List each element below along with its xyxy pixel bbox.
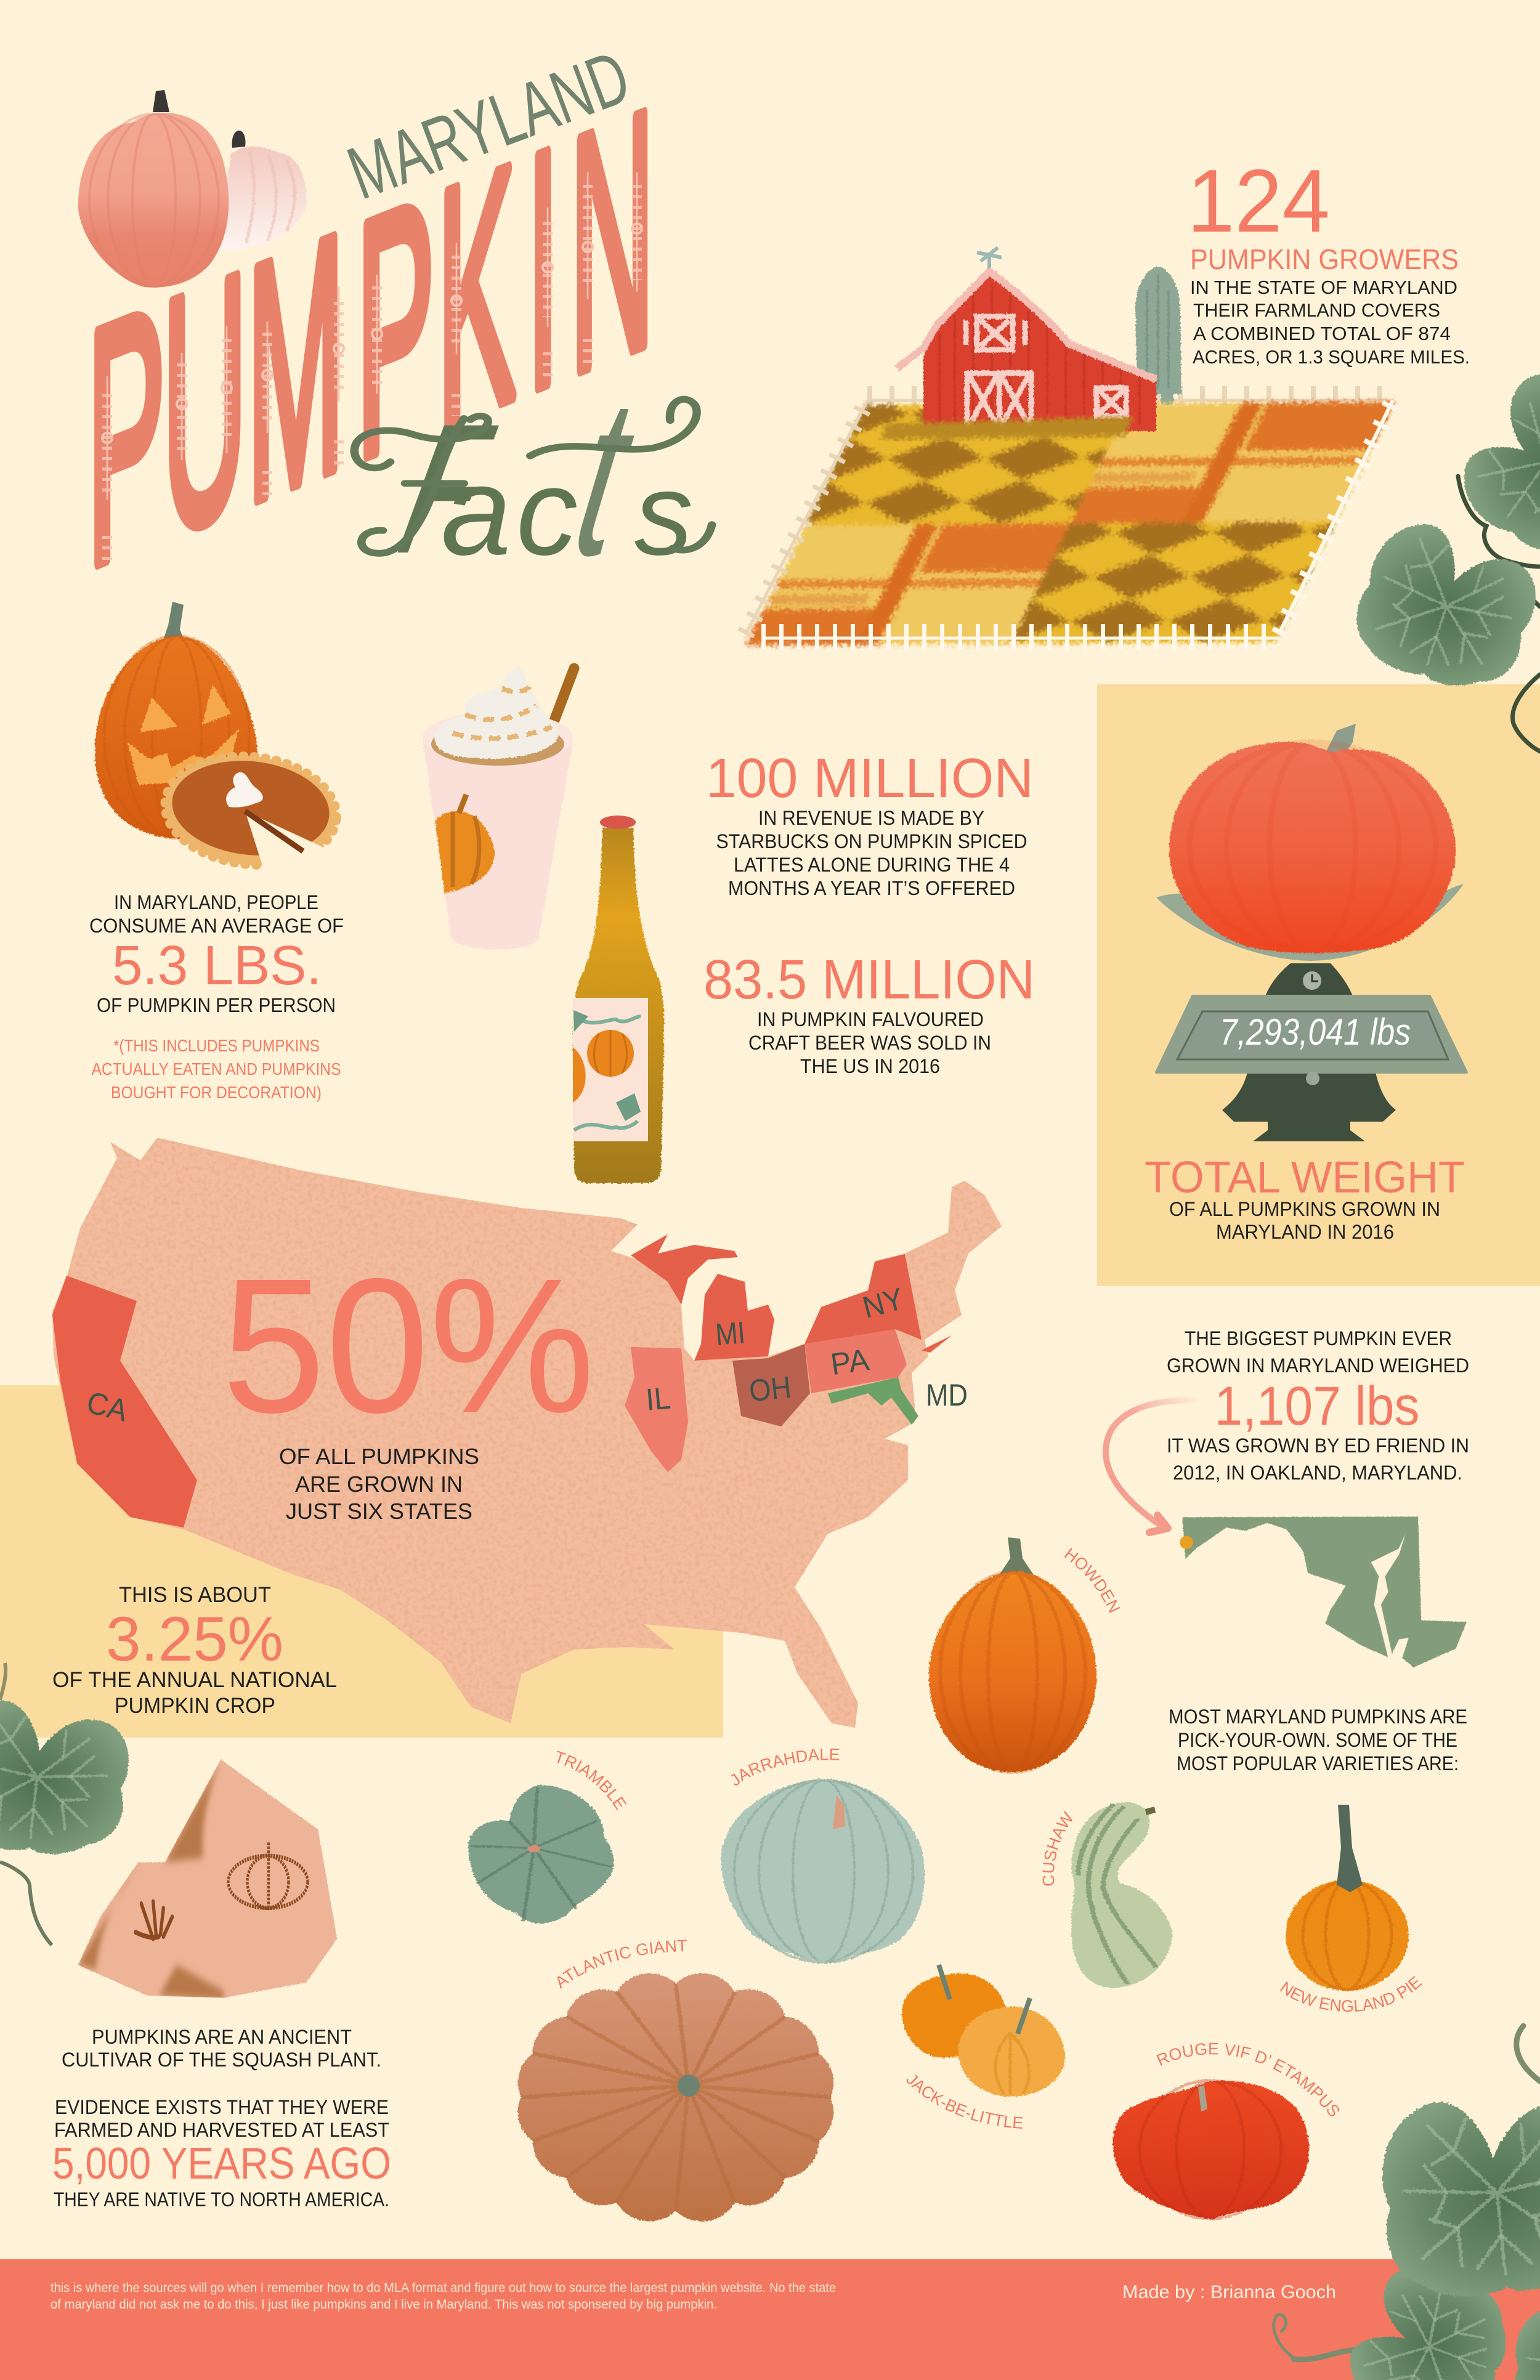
heading and caption: MARYLAND IN 2016 — [1216, 1221, 1394, 1243]
text: consumption per person: 5.3 LBS. — [112, 935, 322, 997]
jarrahdale body — [721, 1780, 925, 1963]
pumpkin: Triamble — [467, 1751, 627, 1924]
arrow: to Oakland — [1106, 1400, 1195, 1532]
icon: scale display plate — [1156, 996, 1467, 1072]
giant stem — [678, 2074, 700, 2097]
icon: latte foam — [431, 722, 564, 766]
tendrils — [0, 1663, 52, 1945]
illustration: ancient rock — [78, 1759, 337, 2000]
heading and caption: TOTAL WEIGHT — [1145, 1153, 1465, 1202]
decoration: left leaf and vine — [0, 1663, 134, 1945]
base map — [52, 1138, 1002, 1728]
field edge in front of barn — [881, 416, 1133, 440]
icon: bottle body — [573, 828, 664, 1183]
text: pick your own: MOST MARYLAND PUMPKINS ARE — [1169, 1706, 1467, 1728]
icon: scale clock — [1303, 971, 1321, 990]
text: consumption per person — [89, 891, 344, 1102]
jarrahdale label: JARRAHDALE — [731, 1748, 839, 1786]
front fence — [761, 637, 1279, 638]
text: 100 million: LATTES ALONE DURING THE 4 — [734, 854, 1010, 876]
state: Michigan upper — [631, 1234, 738, 1305]
howden label: HOWDEN — [1064, 1547, 1120, 1613]
text: pick your own — [1169, 1706, 1467, 1775]
50 percent headline: 50% — [222, 1238, 595, 1452]
icon: pumpkin pie — [160, 748, 342, 873]
text: biggest pumpkin: GROWN IN MARYLAND WEIGHED — [1167, 1354, 1469, 1377]
state: Ohio — [732, 1344, 810, 1427]
icon: giant red pumpkin — [1169, 742, 1456, 953]
pumpkin: New England Pie — [1280, 1805, 1422, 2012]
heading and caption: OF ALL PUMPKINS GROWN IN — [1169, 1198, 1440, 1220]
icon: cinnamon stick — [552, 668, 574, 727]
icon: scale body — [1265, 963, 1353, 998]
title letter F: F — [384, 385, 509, 592]
giant label: ATLANTIC GIANT — [557, 1940, 687, 1989]
cushaw label: CUSHAW — [1042, 1811, 1072, 1886]
text: 100 million: STARBUCKS ON PUMPKIN SPICED — [716, 830, 1027, 852]
icon: whipped cream — [434, 668, 559, 759]
icon: white pumpkin stem — [232, 131, 246, 148]
first little pumpkin — [902, 1973, 1006, 2058]
text: consumption per person: BOUGHT FOR DECORATION) — [111, 1083, 322, 1102]
footer band — [0, 2259, 1540, 2380]
text: 124 pumpkin growers — [1187, 151, 1470, 368]
text: consumption per person: *(THIS INCLUDES PUMPKINS — [113, 1036, 320, 1055]
icon: foam rim — [423, 712, 573, 764]
panel: total weight — [1145, 724, 1467, 1243]
icon: bottle cap — [600, 816, 636, 829]
icon: display knob — [1306, 1072, 1319, 1085]
text: consumption per person: IN MARYLAND, PEOPLE — [114, 891, 318, 913]
icon: cup — [423, 739, 573, 950]
title letters a and c: a — [441, 440, 511, 581]
leaf — [0, 1696, 134, 1861]
text: 83.5 million: IN PUMPKIN FALVOURED — [757, 1008, 984, 1030]
leaf far right — [1515, 2307, 1540, 2380]
icon: jack-o-lantern — [95, 636, 259, 839]
text: 100 million: IN REVENUE IS MADE BY — [758, 807, 984, 829]
leaf lower — [1337, 2254, 1523, 2380]
Chesapeake bay — [1371, 1534, 1406, 1658]
icon: large pumpkin stem — [153, 90, 169, 112]
decoration: upper right leaves and vines — [1343, 357, 1540, 751]
text: ancient cultivar: EVIDENCE EXISTS THAT THEY WERE — [55, 2096, 389, 2118]
state: Illinois — [625, 1347, 688, 1472]
text: 124 pumpkin growers: IN THE STATE OF MARYLAND — [1190, 277, 1457, 298]
panel: national crop background — [0, 1385, 723, 1738]
text: 124 pumpkin growers: ACRES, OR 1.3 SQUARE MILES. — [1193, 346, 1470, 368]
illustration: pumpkin spice latte — [423, 668, 574, 950]
text: biggest pumpkin: 1,107 lbs — [1215, 1375, 1419, 1436]
state: New York — [804, 1254, 952, 1353]
text: annual national crop share — [52, 1583, 337, 1718]
state labels: MD — [926, 1378, 968, 1412]
jarrahdale stem — [833, 1795, 845, 1829]
icon: pumpkin stem — [1326, 724, 1356, 755]
state labels — [83, 1281, 968, 1428]
footer: sources note: of maryland did not ask me to do this, I just like pumpkins and I live in Maryland. This was not sponsered by big pumpkin. — [51, 2297, 717, 2312]
text: ancient cultivar: THEY ARE NATIVE TO NORTH AMERICA. — [54, 2188, 389, 2211]
text: 124 pumpkin growers: THEIR FARMLAND COVERS — [1193, 299, 1440, 321]
footer: sources note — [51, 2281, 836, 2312]
icon: pink title pumpkins — [78, 90, 307, 288]
footer: sources note: this is where the sources will go when I remember how to do MLA format and figure out how to source the largest pumpkin website. No the state — [51, 2281, 836, 2295]
text: biggest pumpkin: THE BIGGEST PUMPKIN EVER — [1185, 1327, 1452, 1350]
leaf large — [1374, 2085, 1540, 2304]
text: pick your own: MOST POPULAR VARIETIES ARE: — [1177, 1752, 1459, 1775]
state: Maryland — [828, 1377, 918, 1425]
text: annual national crop share: OF THE ANNUAL NATIONAL — [52, 1668, 337, 1692]
text: annual national crop share: 3.25% — [106, 1604, 283, 1674]
etching: hand print — [136, 1901, 172, 1939]
farm fields — [745, 402, 1395, 646]
title ornaments on letters — [102, 173, 642, 561]
six states caption — [279, 1444, 479, 1524]
state labels: NY — [859, 1281, 907, 1325]
heading and caption — [1145, 1153, 1465, 1243]
pumpkin: Atlantic Giant — [516, 1940, 834, 2222]
text: annual national crop share: PUMPKIN CROP — [115, 1694, 275, 1718]
side fence right — [1279, 400, 1393, 634]
footer: credit: Made by : Brianna Gooch — [1122, 2282, 1336, 2302]
text: 83.5 million — [703, 949, 1035, 1077]
chart: Maryland map — [1180, 1516, 1467, 1667]
text: 83.5 million: THE US IN 2016 — [800, 1055, 940, 1077]
state: California — [52, 1276, 197, 1528]
text: consumption per person: CONSUME AN AVERAGE OF — [89, 915, 344, 937]
pie pumpkin stem — [1337, 1805, 1363, 1892]
icon: cup pumpkin logo — [435, 795, 495, 893]
howden stem — [998, 1537, 1035, 1577]
state: Pennsylvania — [804, 1329, 907, 1393]
text: biggest pumpkin: 2012, IN OAKLAND, MARYLAND. — [1173, 1462, 1462, 1484]
icon: pumpkin ribs — [89, 114, 219, 286]
icon: bottle label — [573, 998, 648, 1141]
text: 124 pumpkin growers: A COMBINED TOTAL OF 874 — [1193, 323, 1451, 344]
state labels: OH — [747, 1370, 793, 1408]
rouge label: ROUGE VIF D’ ETAMPUS — [1156, 2042, 1339, 2116]
tendrils — [1274, 2026, 1540, 2360]
text: 83.5 million: 83.5 MILLION — [703, 949, 1035, 1011]
text: 100 million: 100 MILLION — [706, 748, 1034, 809]
triamble label: TRIAMBLE — [557, 1751, 627, 1811]
illustration: beer bottle — [573, 816, 664, 1183]
six states caption: OF ALL PUMPKINS — [279, 1444, 479, 1469]
giant body — [518, 1973, 833, 2221]
text: 100 million: MONTHS A YEAR IT’S OFFERED — [728, 877, 1015, 899]
leaf — [1343, 511, 1540, 704]
icon: large pink pumpkin — [78, 113, 229, 288]
pie pumpkin body — [1286, 1880, 1409, 1991]
pumpkin: Howden — [928, 1537, 1120, 1775]
tendrils — [1458, 476, 1540, 751]
pumpkin: Jarrahdale — [720, 1748, 925, 1964]
state: Michigan lower — [694, 1274, 774, 1361]
howden body — [929, 1572, 1096, 1772]
state labels: MI — [714, 1315, 747, 1352]
cushaw body — [1071, 1802, 1172, 1988]
text: ancient cultivar: PUMPKINS ARE AN ANCIENT — [92, 2026, 352, 2048]
rouge body — [1113, 2081, 1309, 2219]
icon: scale bowl — [1156, 884, 1464, 961]
triamble body — [468, 1785, 614, 1924]
chart: US map — [52, 1138, 1002, 1728]
icon: red barn — [897, 272, 1156, 431]
title letter t: t — [561, 352, 649, 602]
leaf upper — [1446, 357, 1540, 569]
decoration: bottom right leaves and vines — [1274, 2026, 1540, 2380]
six states caption: JUST SIX STATES — [286, 1499, 472, 1524]
display inner frame — [1177, 1011, 1448, 1059]
icon: stem — [163, 602, 185, 642]
icon: silo — [1135, 267, 1181, 405]
text: 100 million — [706, 748, 1034, 899]
icon: scale base — [1222, 1072, 1396, 1141]
title: Pumpkin: PUMPKIN — [87, 38, 655, 637]
side fence left — [745, 400, 867, 634]
text: ancient cultivar: FARMED AND HARVESTED AT LEAST — [54, 2119, 389, 2141]
text: 124 pumpkin growers: PUMPKIN GROWERS — [1190, 243, 1459, 275]
back fence — [867, 397, 1393, 400]
icon: Oakland pumpkin marker — [1180, 1536, 1193, 1549]
six states caption: ARE GROWN IN — [295, 1471, 463, 1497]
text: annual national crop share: THIS IS ABOUT — [119, 1583, 271, 1607]
icon: weathervane — [977, 248, 1002, 270]
second stem — [1018, 1998, 1030, 2034]
pumpkin: Jack-be-little — [901, 1964, 1066, 2129]
title letter s: s — [634, 449, 693, 580]
text: ancient cultivar: 5,000 YEARS AGO — [52, 2139, 391, 2188]
title letters a and c: c — [516, 443, 578, 581]
pumpkin: Rouge Vif d'Etampes — [1111, 2042, 1339, 2221]
text: 83.5 million: CRAFT BEER WAS SOLD IN — [748, 1032, 991, 1054]
state labels: PA — [829, 1342, 872, 1382]
rock shape — [78, 1759, 337, 1997]
etching: pumpkin — [228, 1842, 308, 1908]
text: 124 pumpkin growers: 124 — [1187, 151, 1330, 251]
text: consumption per person: OF PUMPKIN PER PERSON — [97, 994, 336, 1016]
weight value: 7,293,041 lbs — [1220, 1011, 1411, 1053]
text: biggest pumpkin: IT WAS GROWN BY ED FRIEND IN — [1167, 1435, 1469, 1457]
second little pumpkin — [958, 2007, 1065, 2097]
panel: total weight background — [1097, 684, 1540, 1286]
illustration: farm — [745, 248, 1395, 646]
text: ancient cultivar — [52, 2026, 391, 2211]
state labels: CA — [83, 1385, 131, 1428]
first stem — [939, 1965, 950, 1999]
jack-be-little label: JACK-BE-LITTLE — [907, 2074, 1023, 2129]
rouge stem — [1198, 2086, 1207, 2111]
cushaw stem — [1146, 1810, 1155, 1812]
title: Facts — [354, 352, 712, 602]
state shape — [1182, 1516, 1467, 1667]
text: ancient cultivar: CULTIVAR OF THE SQUASH PLANT. — [62, 2049, 381, 2071]
pumpkin: Cushaw — [1042, 1801, 1173, 1988]
text: consumption per person: ACTUALLY EATEN AND PUMPKINS — [91, 1059, 341, 1079]
title flourishes — [354, 399, 712, 553]
text: pick your own: PICK-YOUR-OWN. SOME OF THE — [1178, 1729, 1457, 1751]
rock shaded facets — [78, 1759, 224, 2000]
state labels: IL — [644, 1380, 672, 1417]
text: biggest pumpkin — [1167, 1327, 1469, 1484]
pie pumpkin label: NEW ENGLAND PIE — [1280, 1976, 1422, 2012]
illustration: jack-o-lantern and pie — [95, 602, 342, 873]
icon: small white pumpkin — [219, 147, 307, 250]
